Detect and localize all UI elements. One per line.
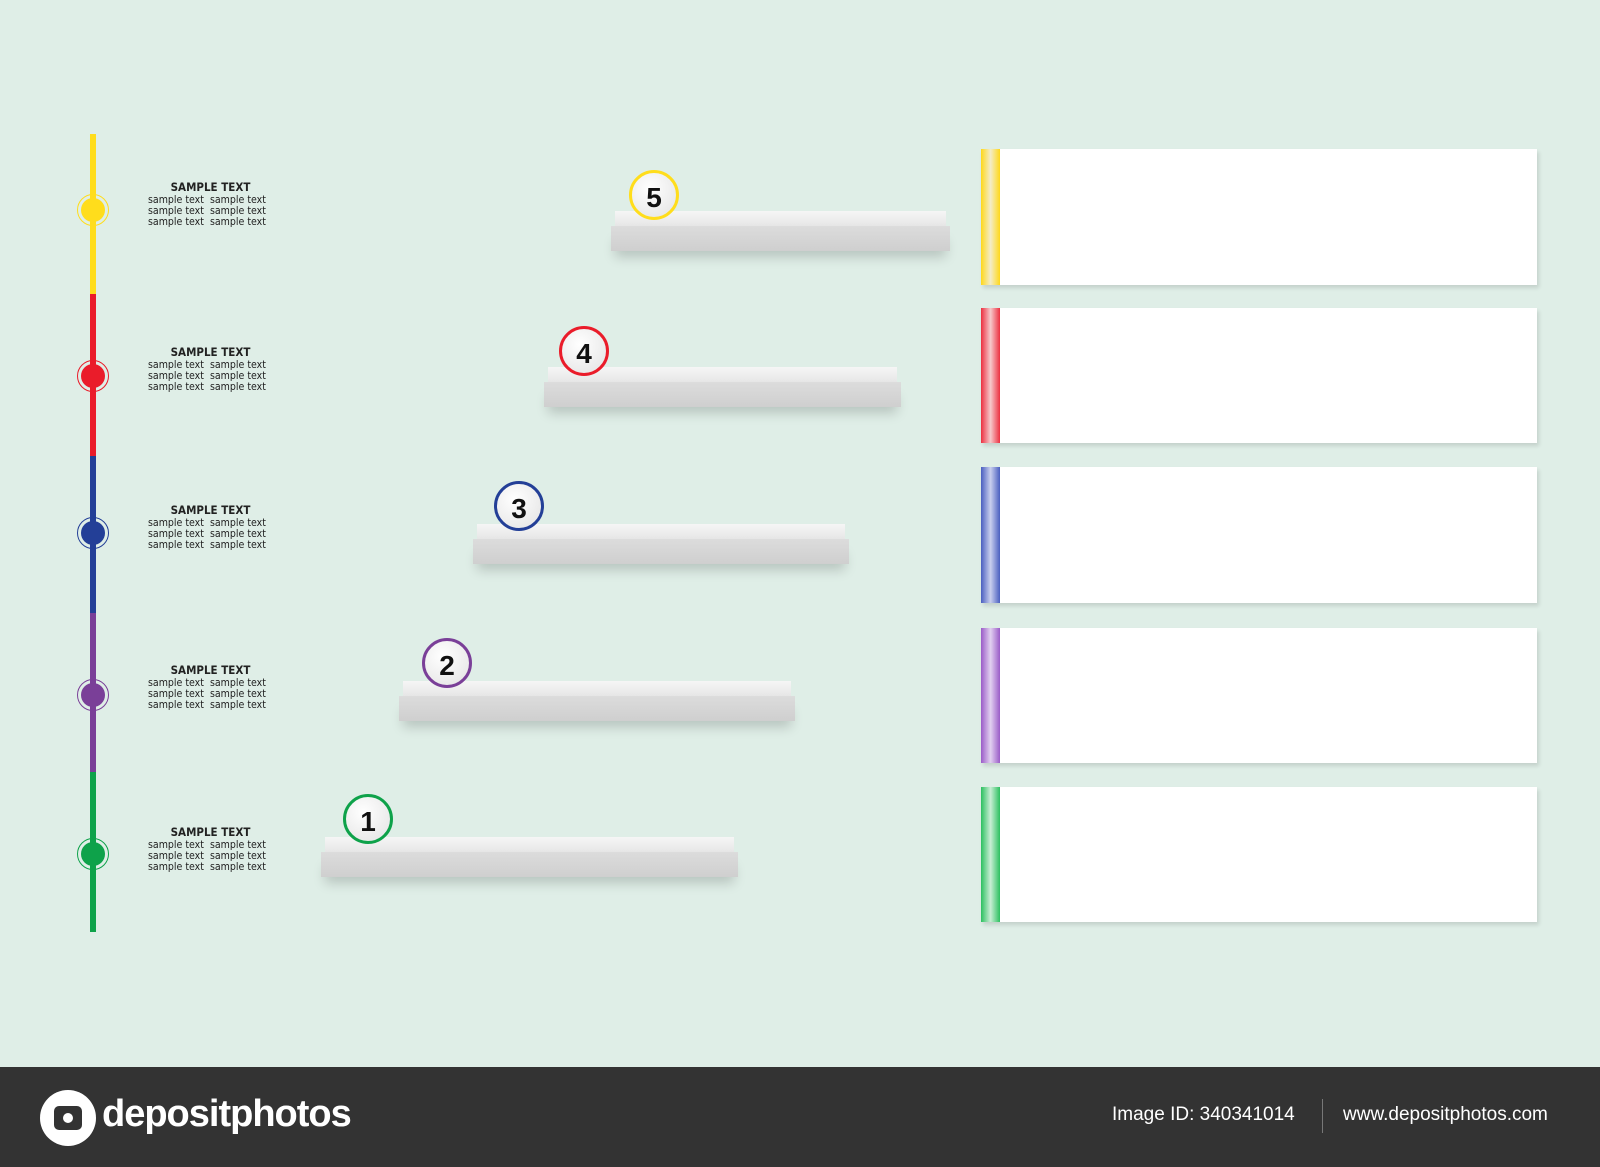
- card 3: [981, 467, 1537, 603]
- text block 2: sample text sample text: [148, 699, 266, 711]
- footer logo: depositphotos: [102, 1093, 351, 1135]
- timeline dot yellow: [81, 198, 105, 222]
- timeline dot purple: [81, 683, 105, 707]
- text block 1: sample text sample text: [148, 850, 266, 862]
- text block 4: sample text sample text: [148, 370, 266, 382]
- badge 2: [422, 638, 472, 688]
- text block 3: sample text sample text: [148, 528, 266, 540]
- badge 3: [494, 481, 544, 531]
- badge 5: [629, 170, 679, 220]
- text block 5: SAMPLE TEXT: [171, 180, 250, 194]
- text block 1: sample text sample text: [148, 861, 266, 873]
- timeline dot red: [81, 364, 105, 388]
- text block 3: SAMPLE TEXT: [171, 503, 250, 517]
- footer logo: [40, 1090, 351, 1146]
- text block 4: sample text sample text: [148, 381, 266, 393]
- text block 3: [148, 503, 266, 551]
- website: www.depositphotos.com: [1343, 1104, 1548, 1125]
- text block 5: sample text sample text: [148, 194, 266, 206]
- badge 3: 3: [511, 493, 527, 524]
- text block 2: sample text sample text: [148, 677, 266, 689]
- shelf 1: [320, 837, 738, 888]
- text block 2: [148, 663, 266, 711]
- text block 1: SAMPLE TEXT: [171, 825, 250, 839]
- badge 1: 1: [360, 806, 376, 837]
- card 1: [981, 787, 1537, 922]
- text block 1: sample text sample text: [148, 839, 266, 851]
- shelf 2: [398, 681, 796, 732]
- timeline: [90, 134, 96, 932]
- timeline dot green: [81, 842, 105, 866]
- text block 3: sample text sample text: [148, 539, 266, 551]
- image id: Image ID: 340341014: [1112, 1104, 1295, 1125]
- text block 4: SAMPLE TEXT: [171, 345, 250, 359]
- footer: [0, 1067, 1600, 1167]
- text block 2: SAMPLE TEXT: [171, 663, 250, 677]
- card 5: [981, 149, 1537, 285]
- text block 5: [148, 180, 266, 228]
- badge 4: [559, 326, 609, 376]
- timeline dot blue: [81, 521, 105, 545]
- shelf 4: [544, 367, 902, 418]
- text block 1: [148, 825, 266, 873]
- shelf 3: [472, 524, 850, 575]
- badge 2: 2: [439, 650, 455, 681]
- text block 2: sample text sample text: [148, 688, 266, 700]
- text block 4: sample text sample text: [148, 359, 266, 371]
- text block 4: [148, 345, 266, 393]
- badge 4: 4: [576, 338, 592, 369]
- badge 1: [343, 794, 393, 844]
- card 2: [981, 628, 1537, 763]
- card 4: [981, 308, 1537, 443]
- shelf 5: [610, 211, 950, 262]
- text block 5: sample text sample text: [148, 216, 266, 228]
- text block 5: sample text sample text: [148, 205, 266, 217]
- icon: camera: [40, 1090, 96, 1146]
- badge 5: 5: [646, 182, 662, 213]
- text block 3: sample text sample text: [148, 517, 266, 529]
